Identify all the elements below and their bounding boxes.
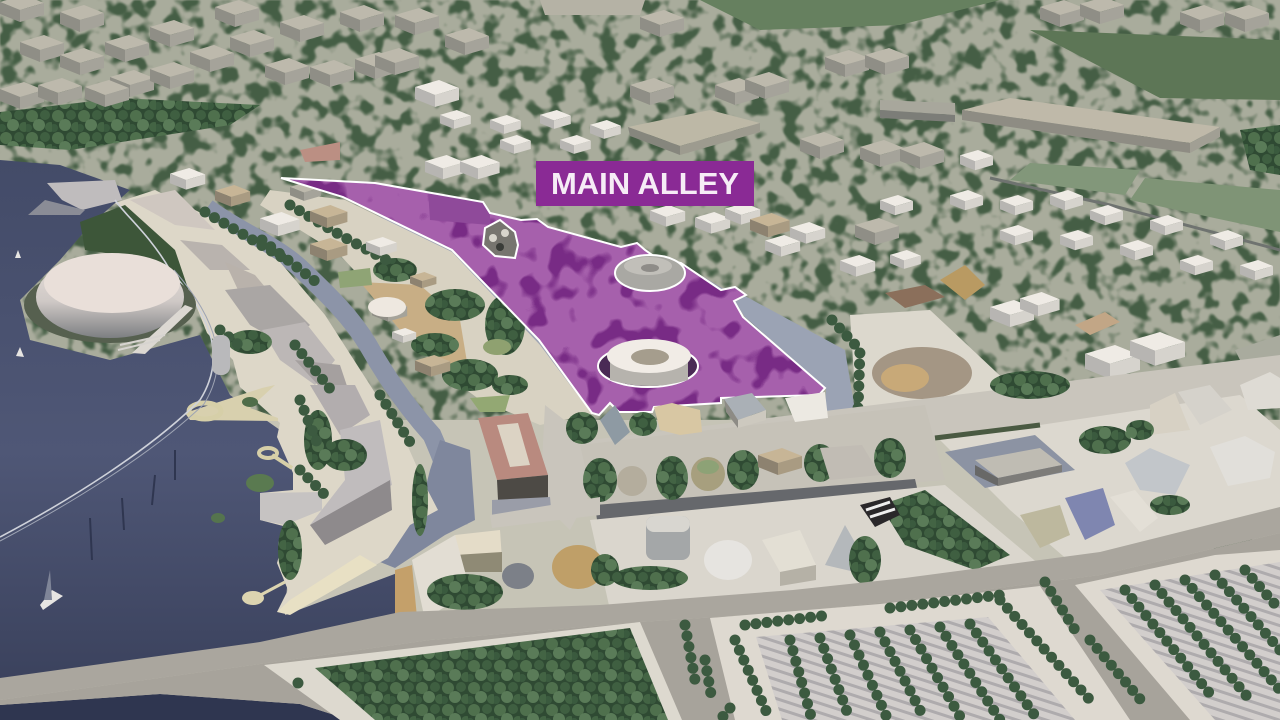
building: small cluster (483, 220, 518, 258)
waterfront promenade (28, 180, 438, 615)
building: ring tower (598, 339, 698, 387)
lower road surface (0, 533, 1280, 720)
cultural campus west of the alley (170, 142, 592, 425)
east block pavilions (990, 371, 1280, 553)
red-roof hall (478, 413, 600, 528)
roadside trees (298, 625, 730, 720)
lake details: monorail and sailboats (0, 200, 274, 610)
warehouses (628, 98, 1220, 155)
inner canal (207, 208, 475, 568)
lower lake (0, 694, 350, 720)
cross road and central block (540, 355, 1280, 610)
sports fields (990, 163, 1280, 250)
tree block south of the road (264, 622, 682, 720)
main road (0, 507, 1280, 700)
building south of the alley (566, 392, 828, 445)
canal beside the alley (350, 190, 860, 415)
stadium (24, 253, 196, 354)
parking lot, east (1045, 550, 1280, 720)
buildings south of the strip (395, 490, 1010, 628)
label: main alley: MAIN ALLEY (551, 166, 739, 201)
white houses, upper right (425, 110, 1280, 379)
city buildings, upper left (0, 0, 1269, 169)
parking lot, centre (710, 586, 1130, 720)
main alley highlighted area (270, 170, 840, 420)
label: main alley (536, 161, 754, 206)
plaza east of the alley (850, 310, 1020, 428)
urban tree canopy (0, 0, 1280, 420)
lake (0, 160, 400, 692)
building: donut pavilion (615, 255, 685, 291)
